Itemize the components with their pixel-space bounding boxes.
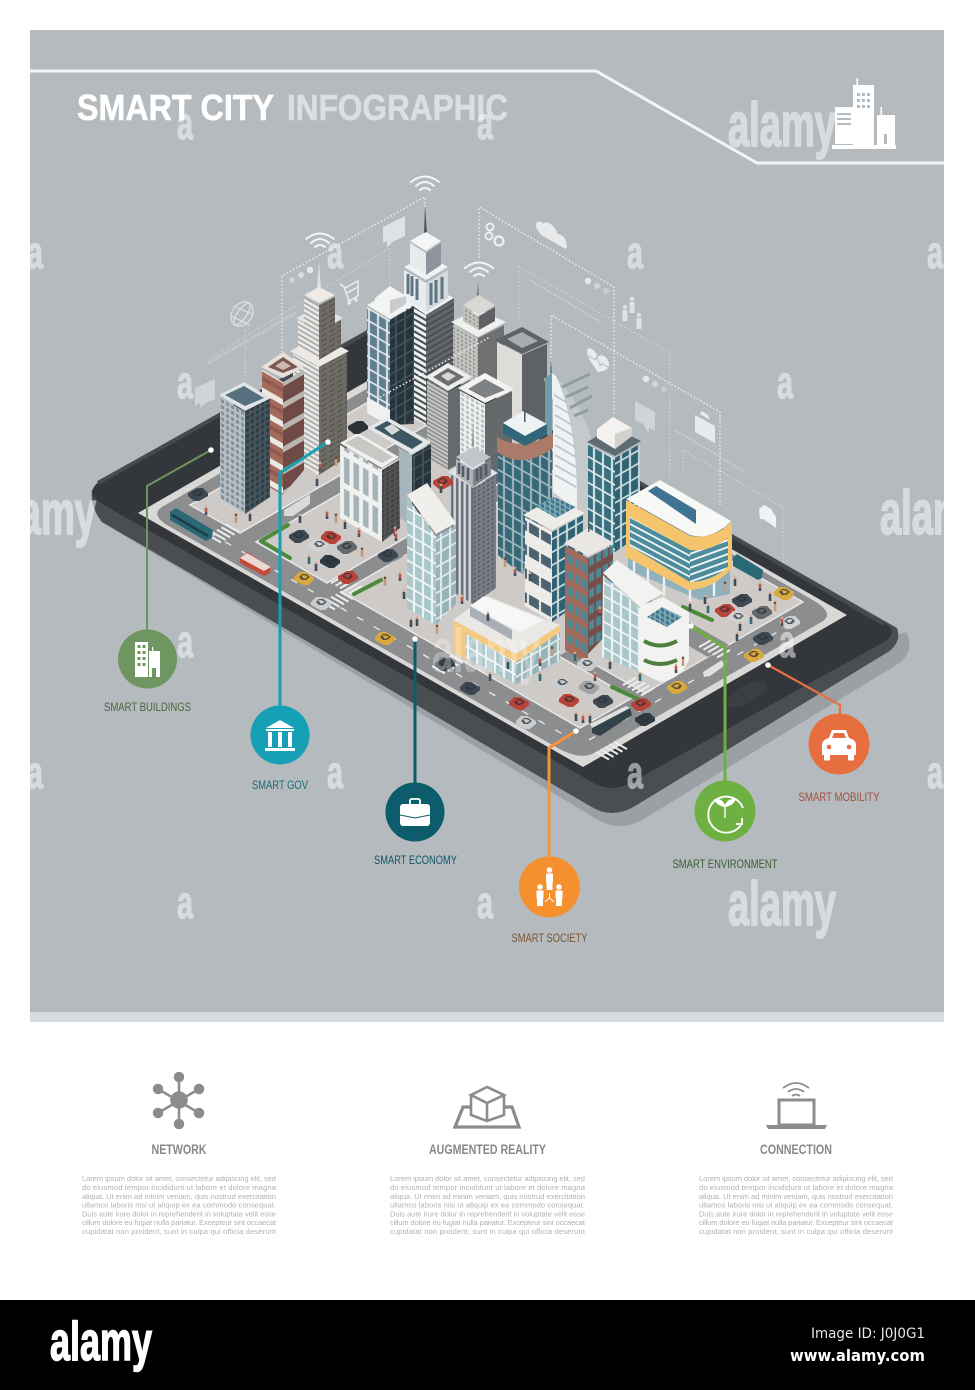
icon: wifi right <box>465 262 493 276</box>
watermarks: a <box>777 357 794 408</box>
node: smart buildings <box>104 630 191 714</box>
hedges <box>261 525 712 700</box>
building: teal rooftop block <box>367 417 431 525</box>
paragraph: cillum dolore eu fugiat nulla pariatur. Excepteur sint occaecat <box>699 1218 894 1227</box>
bus: white front <box>590 706 632 736</box>
bus: red <box>240 552 271 576</box>
label: SMART BUILDINGS <box>104 700 191 714</box>
icon: government building <box>265 720 295 751</box>
heading: CONNECTION <box>760 1142 832 1157</box>
icon: wifi top <box>411 176 439 190</box>
icon: car <box>822 730 856 760</box>
watermark over city: alamy <box>432 617 540 686</box>
node: smart society <box>512 856 588 945</box>
watermarks: a <box>177 357 194 408</box>
tower: teal glass with mansard roof <box>587 417 641 552</box>
icon: gears <box>486 224 504 246</box>
watermarks: a <box>477 98 494 149</box>
dotted line across towers <box>380 337 490 397</box>
icon: speech bubble left <box>195 379 215 408</box>
icon: briefcase <box>400 799 430 826</box>
footer logo: alamy <box>50 1310 152 1372</box>
connector: smart buildings <box>147 447 214 632</box>
tower: grey back right <box>495 327 549 440</box>
paragraph: ullamco laboris nisi ut aliquip ex ea commodo consequat. <box>82 1200 276 1210</box>
connector: smart environment <box>688 623 725 783</box>
pavement blocks <box>190 378 803 728</box>
watermarks: a <box>27 747 44 798</box>
bus: teal left <box>170 508 213 541</box>
paragraph: Lorem ipsum dolor sit amet, consectetur adipiscing elit, sed <box>82 1174 276 1183</box>
tablet side <box>92 330 898 813</box>
icon: heart <box>587 346 609 379</box>
label: SMART SOCIETY <box>512 931 588 945</box>
watermarks: a <box>627 747 644 798</box>
dotted data frames <box>207 197 783 577</box>
icon: wifi left <box>306 234 334 247</box>
city ground <box>138 361 847 767</box>
truck: silver right <box>703 660 724 677</box>
column: augmented reality <box>390 1087 586 1236</box>
watermarks: a <box>177 98 194 149</box>
buses and trucks <box>170 494 763 736</box>
title <box>77 87 508 128</box>
tower: glass front left <box>219 382 271 514</box>
tower: beige skyscraper <box>290 262 349 475</box>
building: balconies with solar roof <box>523 497 585 622</box>
connector: smart society <box>549 728 579 860</box>
paragraph: do eiusmod tempor incididunt ut labore et dolore magna <box>390 1183 586 1192</box>
icon: briefcase <box>695 411 715 443</box>
tower: grey stone with spire <box>448 420 498 604</box>
tower: back grey with antenna <box>451 282 506 395</box>
paragraph <box>699 1174 894 1236</box>
footer url: www.alamy.com <box>790 1346 925 1365</box>
paragraph: do eiusmod tempor incididunt ut labore et dolore magna <box>699 1183 894 1192</box>
node: smart environment <box>672 780 778 871</box>
paragraph: Duis aute irure dolor in reprehenderit in voluptate velit esse <box>699 1210 893 1218</box>
watermarks: alamy <box>728 870 836 939</box>
paragraph <box>390 1174 586 1236</box>
paragraph: cillum dolore eu fugiat nulla pariatur. Excepteur sint occaecat <box>390 1218 586 1227</box>
building: yellow low glass <box>453 596 560 684</box>
icon: car on frame <box>759 505 776 528</box>
paragraph: ullamco laboris nisi ut aliquip ex ea commodo consequat. <box>699 1200 893 1210</box>
watermarks: a <box>327 747 344 798</box>
connector: smart gov <box>280 439 331 708</box>
node: smart economy <box>374 782 457 867</box>
icon: people <box>536 867 562 906</box>
label: SMART ECONOMY <box>374 853 457 867</box>
watermarks: a <box>927 747 944 798</box>
dots <box>289 267 667 392</box>
tower: white sail <box>544 357 597 510</box>
pedestrians <box>205 456 783 723</box>
title: INFOGRAPHIC <box>287 87 508 128</box>
panel: main grey panel <box>30 30 944 1012</box>
icon: cart <box>340 281 358 304</box>
paragraph: Duis aute irure dolor in reprehenderit in voluptate velit esse <box>82 1210 276 1218</box>
heading: AUGMENTED REALITY <box>429 1142 546 1157</box>
tablet shadow <box>98 520 910 826</box>
footer image id: Image ID: J0J0G1 <box>811 1326 925 1342</box>
watermarks: a <box>327 227 344 278</box>
watermarks: a <box>177 616 194 667</box>
icon: buildings <box>135 642 160 677</box>
watermarks: a <box>27 227 44 278</box>
tablet device <box>92 327 910 826</box>
paragraph: aliqua. Ut enim ad minim veniam, quis nostrud exercitation <box>699 1192 893 1201</box>
tower: brick stepped <box>261 352 304 495</box>
header rule line <box>30 71 944 163</box>
crosswalks <box>208 525 730 760</box>
icon: network <box>154 1073 203 1128</box>
icon: AR cube on tablet <box>455 1087 519 1127</box>
label: SMART ENVIRONMENT <box>672 857 778 871</box>
column: network <box>82 1073 277 1236</box>
paragraph: do eiusmod tempor incididunt ut labore et dolore magna <box>82 1183 277 1192</box>
icon: globe <box>226 298 258 330</box>
tower: pale glass leaning <box>407 483 456 625</box>
icon: sprout in ring <box>708 797 743 833</box>
column: connection <box>699 1083 894 1236</box>
tablet screen surface <box>92 327 892 788</box>
tower: dark glass <box>367 286 414 426</box>
paragraph: cupidatat non proident, sunt in culpa qui officia deserunt <box>82 1227 277 1236</box>
building: brick and teal <box>564 516 614 664</box>
truck: white <box>284 494 310 516</box>
paragraph: cupidatat non proident, sunt in culpa qui officia deserunt <box>699 1227 894 1236</box>
panel base strip <box>30 1012 944 1022</box>
paragraph: Lorem ipsum dolor sit amet, consectetur adipiscing elit, sed <box>699 1174 893 1183</box>
cars <box>188 421 800 729</box>
connector: smart economy <box>412 636 418 786</box>
icon: laptop with wifi <box>766 1083 827 1129</box>
road network <box>157 372 827 756</box>
paragraph <box>82 1174 277 1236</box>
watermarks <box>0 91 975 939</box>
tower: white grid <box>458 373 514 490</box>
watermarks: a <box>627 227 644 278</box>
watermarks: a <box>927 227 944 278</box>
tower: grey stripe mid <box>425 363 472 470</box>
paragraph: Duis aute irure dolor in reprehenderit in voluptate velit esse <box>390 1210 585 1218</box>
faint scribble text lines on frames <box>208 280 745 472</box>
paragraph: aliqua. Ut enim ad minim veniam, quis nostrud exercitation <box>390 1192 585 1201</box>
paragraph: cupidatat non proident, sunt in culpa qui officia deserunt <box>390 1227 586 1236</box>
road centre lines <box>192 523 800 740</box>
label: SMART MOBILITY <box>798 790 880 804</box>
icon: people <box>622 297 642 329</box>
icon: speech bubble right <box>635 401 655 434</box>
node: smart mobility <box>798 714 880 804</box>
tower: curved glass with brick cap <box>497 410 553 575</box>
paragraph: cillum dolore eu fugiat nulla pariatur. Excepteur sint occaecat <box>82 1218 277 1227</box>
icon: cloud <box>536 216 567 250</box>
connector: smart mobility <box>765 662 840 716</box>
tower: central skyscraper <box>401 205 454 425</box>
footer bar <box>0 1300 975 1390</box>
building: white office <box>340 433 400 542</box>
side street <box>630 600 729 657</box>
paragraph: aliqua. Ut enim ad minim veniam, quis nostrud exercitation <box>82 1192 276 1201</box>
bus: teal right <box>733 554 763 580</box>
heading: NETWORK <box>152 1142 207 1157</box>
paragraph: Lorem ipsum dolor sit amet, consectetur adipiscing elit, sed <box>390 1174 585 1183</box>
title: SMART CITY <box>77 87 274 128</box>
watermarks: a <box>477 877 494 928</box>
watermarks: a <box>779 616 796 667</box>
watermarks: a <box>177 877 194 928</box>
icon: skyline logo <box>832 78 896 149</box>
paragraph: ullamco laboris nisi ut aliquip ex ea commodo consequat. <box>390 1200 585 1210</box>
home button <box>723 675 771 713</box>
node: smart gov <box>250 706 310 792</box>
building: white drum with terraces <box>602 560 689 682</box>
icons: floating data icons <box>195 216 776 528</box>
building: yellow curved <box>626 480 732 604</box>
watermarks: alamy <box>728 91 836 160</box>
icon: speech bubble <box>383 216 405 247</box>
label: SMART GOV <box>252 778 308 792</box>
